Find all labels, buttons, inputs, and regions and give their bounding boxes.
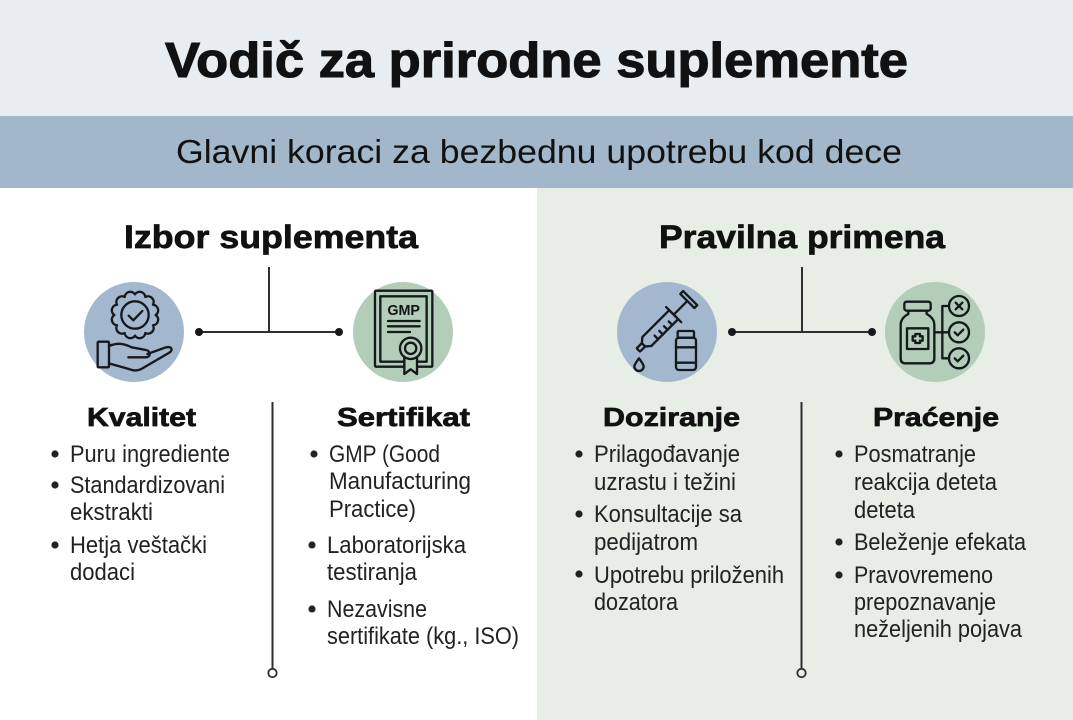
bullet list: sertifikat: GMP (Good <box>329 441 440 468</box>
icon: quality badge and hand <box>84 282 184 382</box>
title: Vodič za prirodne suplemente <box>165 34 908 88</box>
bullet list: sertifikat: Manufacturing <box>329 468 471 495</box>
bullet list: doziranje: dozatora <box>594 589 679 616</box>
bullet list: sertifikat: sertifikate (kg., ISO) <box>327 623 519 650</box>
bullet list: doziranje: uzrastu i težini <box>594 469 736 496</box>
bullet list: sertifikat: Practice) <box>329 496 416 523</box>
bullet list: praćenje: Beleženje efekata <box>854 529 1027 556</box>
subtitle band <box>0 116 1073 188</box>
divider: doziranje and praćenje <box>797 402 806 677</box>
connector: izbor suplementa <box>195 267 343 336</box>
column: praćenje <box>835 402 1027 643</box>
bullet list: kvalitet: Puru ingrediente <box>70 441 230 468</box>
icon: syringe, drop and vial <box>617 282 717 382</box>
bullet list: kvalitet: Standardizovani <box>70 472 225 499</box>
icon: bottle with checklist <box>885 282 985 382</box>
heading: sertifikat: Sertifikat <box>337 402 470 432</box>
header background <box>0 0 1073 116</box>
bullet list: doziranje: Konsultacije sa <box>594 501 743 528</box>
subtitle: Glavni koraci za bezbednu upotrebu kod dece <box>176 133 902 170</box>
heading: doziranje: Doziranje <box>603 402 740 432</box>
bullet list: praćenje: neželjenih pojava <box>854 616 1023 643</box>
panel: pravilna primena <box>575 219 1027 677</box>
connector: pravilna primena <box>728 267 876 336</box>
heading: praćenje: Praćenje <box>873 402 999 432</box>
bullet list: sertifikat: Laboratorijska <box>327 532 467 559</box>
column: doziranje <box>575 402 784 616</box>
bullet list: doziranje <box>575 441 784 616</box>
bullet list: praćenje: prepoznavanje <box>854 589 996 616</box>
divider: kvalitet and sertifikat <box>268 402 277 677</box>
bullet list: doziranje: Prilagođavanje <box>594 441 740 468</box>
bullet list: doziranje: pedijatrom <box>594 529 698 556</box>
bullet list: kvalitet <box>51 441 230 586</box>
bullet list: sertifikat <box>308 441 519 650</box>
heading: kvalitet: Kvalitet <box>87 402 196 432</box>
column: kvalitet <box>51 402 230 586</box>
bullet list: praćenje: Pravovremeno <box>854 562 993 589</box>
panel: pravilna primena background <box>537 188 1073 720</box>
panel: izbor suplementa <box>51 219 519 677</box>
bullet list: doziranje: Upotrebu priloženih <box>594 562 784 589</box>
bullet list: sertifikat: testiranja <box>327 559 418 586</box>
certificate label: GMP <box>387 303 420 319</box>
bullet list: kvalitet: ekstrakti <box>70 499 153 526</box>
bullet list: kvalitet: dodaci <box>70 559 135 586</box>
icon: GMP certificate <box>353 282 453 382</box>
heading: izbor suplementa: Izbor suplementa <box>124 219 418 255</box>
bullet list: praćenje: deteta <box>854 497 916 524</box>
bullet list: sertifikat: Nezavisne <box>327 596 427 623</box>
bullet list: praćenje: Posmatranje <box>854 441 976 468</box>
bullet list: praćenje <box>835 441 1027 643</box>
bullet list: kvalitet: Hetja veštački <box>70 532 207 559</box>
column: sertifikat <box>308 402 519 650</box>
bullet list: praćenje: reakcija deteta <box>854 469 998 496</box>
heading: pravilna primena: Pravilna primena <box>659 219 945 255</box>
